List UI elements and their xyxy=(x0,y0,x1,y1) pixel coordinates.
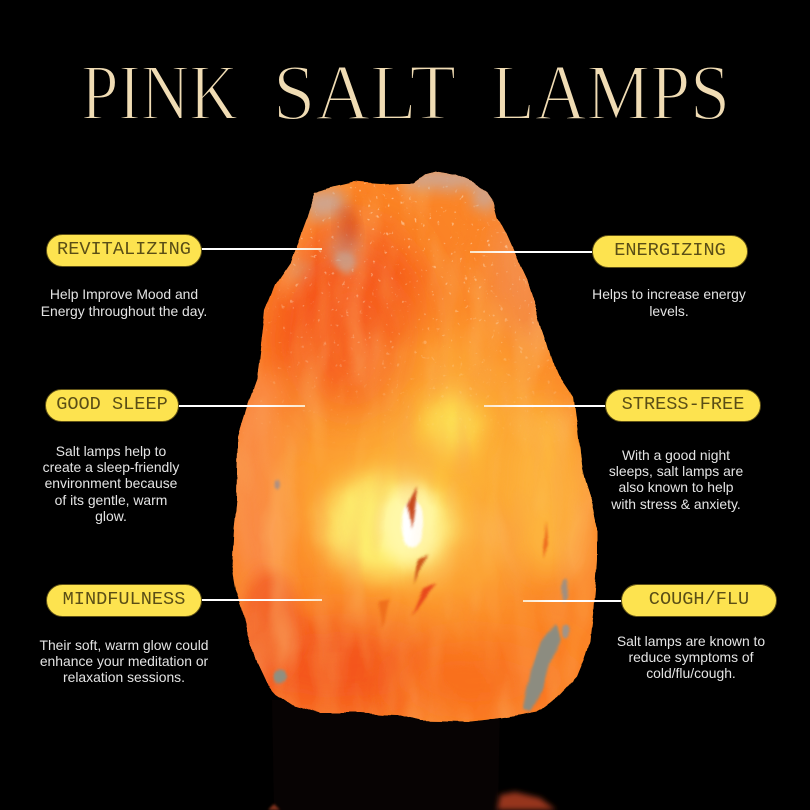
connector: cough/flu xyxy=(523,600,623,602)
text: stress-free: sleeps, salt lamps are xyxy=(609,463,743,479)
connector: energizing xyxy=(470,251,594,253)
connector: stress-free xyxy=(484,405,607,407)
pill: stress-free: STRESS-FREE xyxy=(622,394,744,415)
text: mindfulness: Their soft, warm glow could xyxy=(39,637,209,653)
text: mindfulness xyxy=(39,637,209,685)
text: energizing: Helps to increase energy xyxy=(592,286,746,302)
text: cough/flu: cold/flu/cough. xyxy=(646,665,736,681)
text: energizing: levels. xyxy=(649,303,689,319)
grey top of rock xyxy=(288,169,497,278)
pill: good sleep xyxy=(45,389,179,422)
pill: stress-free xyxy=(605,389,761,422)
lamp base xyxy=(272,700,500,810)
pill: revitalizing xyxy=(46,234,202,267)
text: stress-free: with stress & anxiety. xyxy=(611,496,741,512)
text: mindfulness: enhance your meditation or xyxy=(40,653,208,669)
text: revitalizing xyxy=(41,286,207,319)
pill: good sleep: GOOD SLEEP xyxy=(56,394,168,415)
text: revitalizing: Energy throughout the day. xyxy=(41,303,207,319)
text: revitalizing: Help Improve Mood and xyxy=(50,286,198,302)
pill: cough/flu xyxy=(621,584,777,617)
text: cough/flu: reduce symptoms of xyxy=(628,649,754,665)
title: LAMPS xyxy=(491,50,730,137)
text: good sleep xyxy=(43,443,180,524)
title: PINK xyxy=(81,50,238,137)
yellow core xyxy=(322,473,454,577)
pill: mindfulness xyxy=(46,584,202,617)
text: stress-free: also known to help xyxy=(618,479,734,495)
salt lamp rock xyxy=(220,160,610,730)
pill: cough/flu: COUGH/FLU xyxy=(649,589,749,610)
pill: revitalizing: REVITALIZING xyxy=(57,239,191,260)
text: cough/flu xyxy=(617,633,765,681)
pill: mindfulness: MINDFULNESS xyxy=(63,589,185,610)
lamp and title artwork xyxy=(84,68,725,810)
connector: mindfulness xyxy=(200,599,322,601)
base reflection xyxy=(268,792,556,810)
connector: revitalizing xyxy=(200,248,322,250)
text: mindfulness: relaxation sessions. xyxy=(63,669,185,685)
text: good sleep: Salt lamps help to xyxy=(56,443,166,459)
title: SALT xyxy=(273,50,456,137)
pill: energizing: ENERGIZING xyxy=(614,240,726,261)
crystal texture xyxy=(236,180,569,722)
text: good sleep: glow. xyxy=(95,508,127,524)
grey mineral vein xyxy=(522,625,561,712)
text: cough/flu: Salt lamps are known to xyxy=(617,633,765,649)
title xyxy=(81,50,730,137)
text: stress-free xyxy=(609,447,743,512)
text: energizing xyxy=(592,286,746,319)
text: good sleep: create a sleep-friendly xyxy=(43,459,179,475)
text: stress-free: With a good night xyxy=(622,447,730,463)
pill: energizing xyxy=(592,235,748,268)
connector: good sleep xyxy=(177,405,305,407)
red streaks xyxy=(378,487,548,628)
text: good sleep: environment because xyxy=(45,475,177,491)
text: good sleep: of its gentle, warm xyxy=(55,492,167,508)
